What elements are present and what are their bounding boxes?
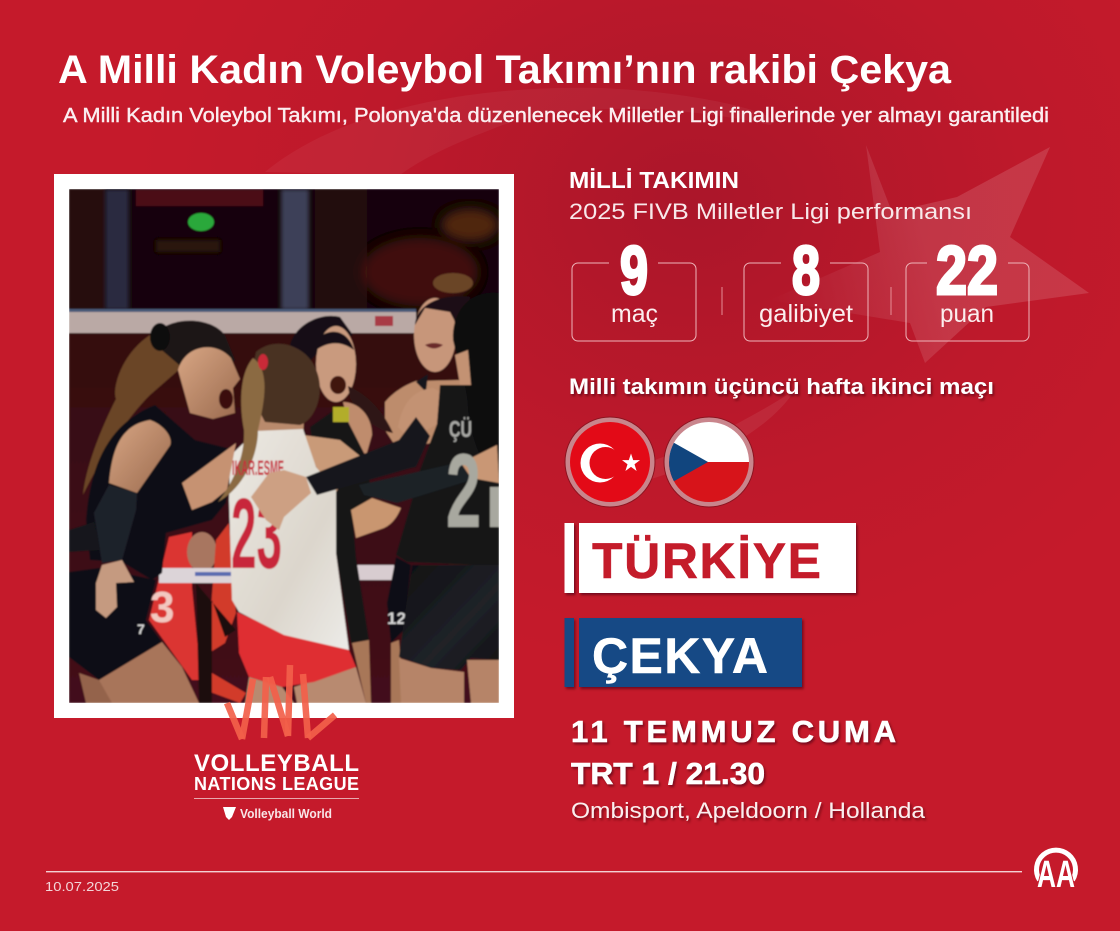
VNL logo and league name xyxy=(194,665,359,821)
team label: Türkiye xyxy=(564,523,856,593)
sponsor name: Volleyball World xyxy=(240,807,332,821)
photo: player in white jersey: IKAR.ESME xyxy=(232,457,284,480)
league name: VOLLEYBALL xyxy=(194,750,359,777)
stat: wins xyxy=(744,232,868,341)
photo: back right player xyxy=(385,273,473,703)
icon: Turkish flag xyxy=(565,417,655,507)
background: faint crescent and star xyxy=(265,88,1089,490)
stat: points xyxy=(906,232,1029,341)
photo: player in white jersey xyxy=(182,344,366,703)
photo: center player xyxy=(290,316,401,703)
stat: matches: 9 xyxy=(620,232,648,309)
heading: team performance: 2025 FIVB Milletler Ligi performansı xyxy=(569,199,972,224)
photo: back right player: 12 xyxy=(387,609,406,628)
match details xyxy=(571,714,926,823)
stat: matches: maç xyxy=(611,300,658,328)
stat: wins: galibiyet xyxy=(759,300,853,328)
team label: Türkiye: TÜRKİYE xyxy=(592,533,821,589)
subtitle: A Milli Kadın Voleybol Takımı, Polonya'da düzenlenecek Milletler Ligi finallerinde yer almayı garantiledi xyxy=(63,105,1049,127)
photo frame xyxy=(54,174,514,718)
stat: matches xyxy=(572,232,696,341)
match details: 11 TEMMUZ CUMA xyxy=(571,714,896,749)
photo: background players xyxy=(149,523,394,703)
heading: team performance: MİLLİ TAKIMIN xyxy=(569,167,739,193)
stat: points: puan xyxy=(940,300,994,328)
title: A Milli Kadın Voleybol Takımı’nın rakibi Çekya xyxy=(58,48,952,92)
stat: points: 22 xyxy=(936,232,998,309)
photo: left player: 7 xyxy=(137,621,145,637)
VNL logo and league name: NATIONS LEAGUE xyxy=(194,774,359,794)
team label: Çekya: ÇEKYA xyxy=(592,628,768,684)
heading: team performance xyxy=(569,167,972,224)
icon: Volleyball World mark xyxy=(223,807,236,820)
photo: team celebrating xyxy=(69,189,499,703)
icon: VNL ribbon mark xyxy=(227,665,335,739)
photo: front right player: 2 xyxy=(446,433,481,550)
photo: front right player xyxy=(251,293,499,703)
icon: Czech flag xyxy=(664,417,754,507)
logo: Anadolu Agency: AA xyxy=(1037,854,1075,896)
stat: wins: 8 xyxy=(792,232,820,309)
photo: player in white jersey: 23 xyxy=(231,478,282,590)
logo: Anadolu Agency xyxy=(1036,850,1076,896)
team label: Çekya xyxy=(564,618,802,687)
match details: TRT 1 / 21.30 xyxy=(571,756,765,791)
photo: left player xyxy=(69,321,240,703)
heading: third week match: Milli takımın üçüncü hafta ikinci maçı xyxy=(569,374,994,399)
match details: Ombisport, Apeldoorn / Hollanda xyxy=(571,798,926,823)
footer date: 10.07.2025 xyxy=(45,879,119,894)
photo: background players: 3 xyxy=(150,583,174,632)
photo: front right player: ÇÜ xyxy=(449,416,472,442)
